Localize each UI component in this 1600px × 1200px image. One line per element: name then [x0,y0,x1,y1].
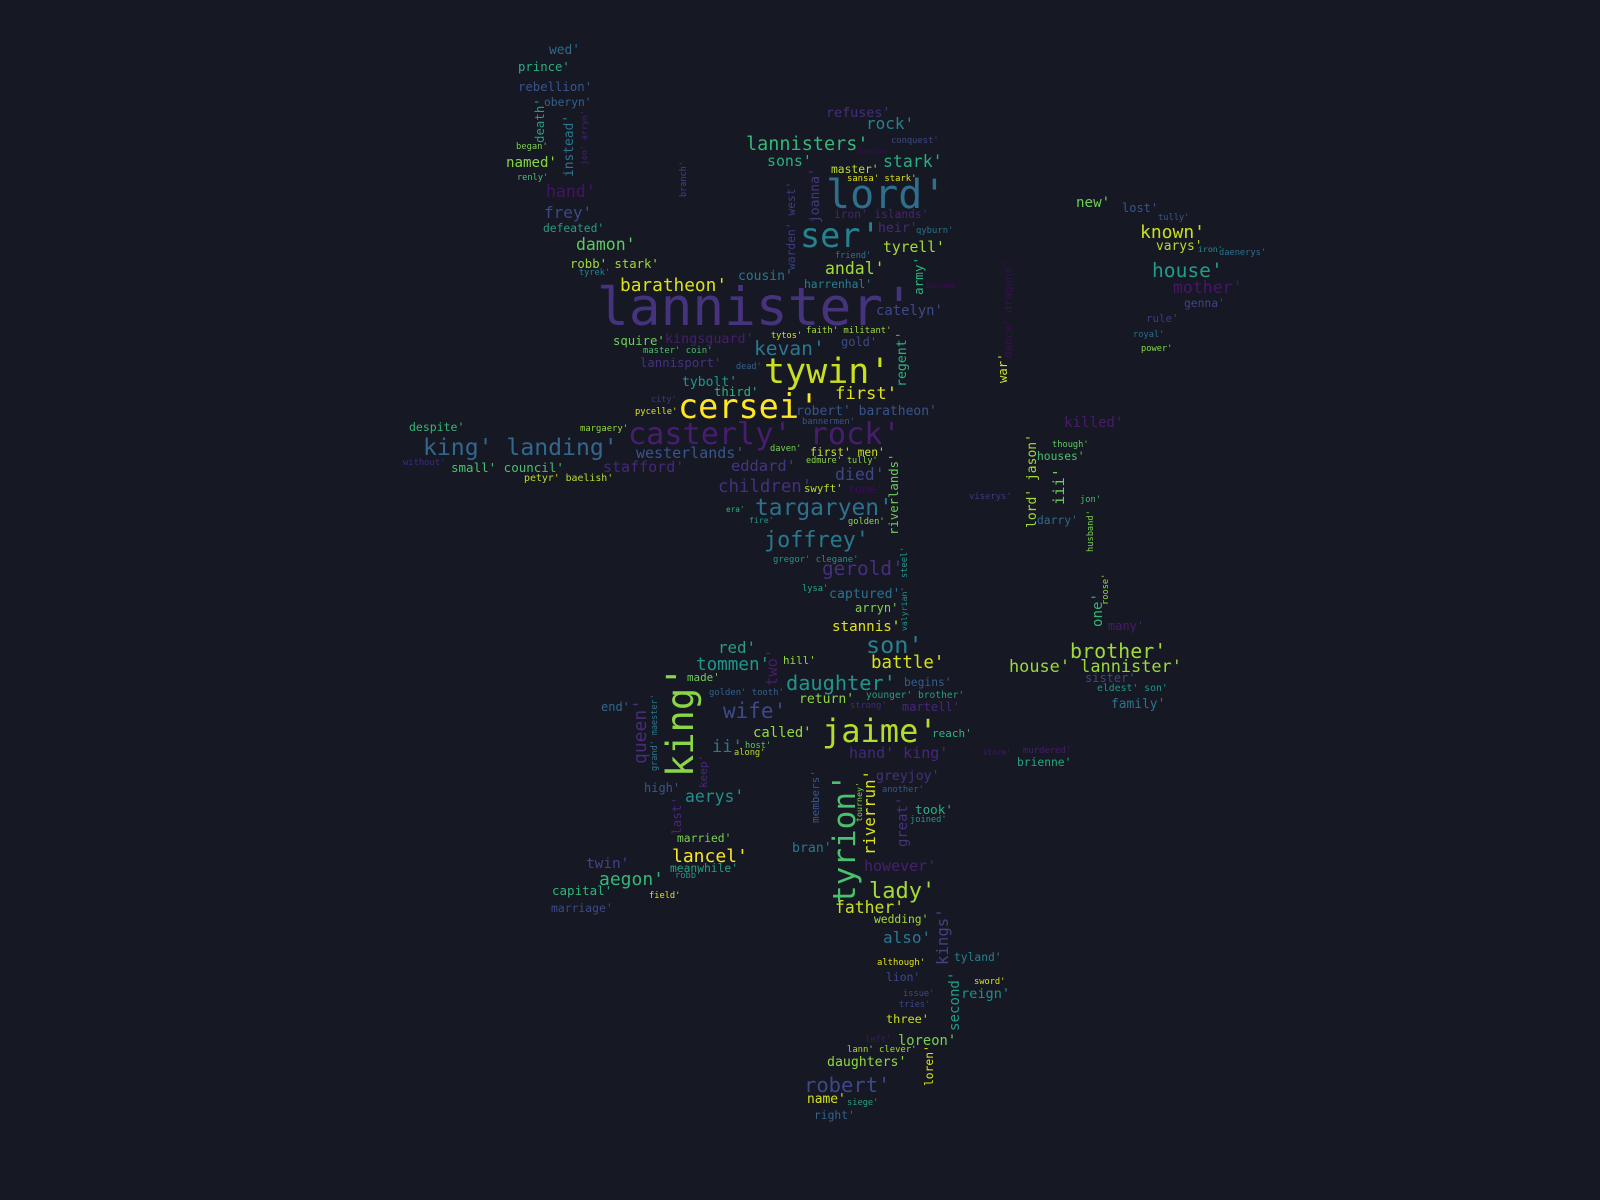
word: younger brother: younger' brother' [866,690,964,701]
word: took: took' [915,802,953,817]
cluster: head [620,106,961,296]
word: heir: heir' [878,221,918,236]
word: become: become' [926,280,961,290]
word: married: married' [677,832,731,845]
word: gold: gold' [841,335,877,349]
word: though: though' [1052,440,1089,450]
word: tourney: tourney' [854,782,864,822]
word: iii: iii' [1050,468,1068,505]
word: reach: reach' [932,727,972,740]
cluster: lower leg [804,898,1010,1122]
word: tries: tries' [899,1000,930,1010]
word: sister: sister' [1085,671,1136,685]
word: tome: tome' [848,482,883,496]
word: name: name' [807,1092,846,1107]
word: end: end' [601,700,630,714]
word: began: began' [516,142,548,152]
word: daughters: daughters' [827,1055,906,1070]
word: edmure tully: edmure' tully' [806,456,878,466]
word: lannisters: lannisters' [746,134,869,155]
word: right: right' [814,1109,855,1122]
word: golden tooth: golden' tooth' [709,688,784,698]
word: wife: wife' [723,699,786,723]
word: tyrek: tyrek' [579,268,610,278]
word: arryn: arryn' [855,601,898,615]
word: gregor clegane: gregor' clegane' [773,555,858,565]
word: daughter: daughter' [786,671,896,695]
word: iron: iron' [1198,244,1223,254]
word: house lannister: house' lannister' [1009,656,1182,676]
word: jon arryn: jon' arryn' [579,110,589,165]
word: lysa: lysa' [802,584,828,594]
word: master: master' [831,163,879,176]
word: tully: tully' [1158,213,1189,223]
word: qyburn: qyburn' [916,226,953,236]
word: dead: dead' [736,362,762,372]
word: three: three' [886,1012,929,1026]
word: loreon: loreon' [898,1033,956,1049]
word: aerys: aerys' [685,787,744,806]
word: murdered: murdered' [1023,746,1071,756]
word: strong: strong' [850,701,887,711]
word: mother: mother' [1173,278,1243,297]
word: swyft: swyft' [804,482,843,495]
word: oberyn: oberyn' [544,96,592,109]
cluster: upper right hand [996,195,1266,383]
word: kings: kings' [933,908,952,965]
word: casterly rock: casterly' rock' [628,417,901,452]
word: tybolt: tybolt' [682,375,737,390]
word: family: family' [1111,697,1165,712]
word: red: red' [718,638,756,657]
word: reign: reign' [961,986,1010,1002]
word: lancel: lancel' [672,846,748,867]
word: grand maester: grand' maester' [650,694,660,771]
word: kevan: kevan' [754,337,825,360]
word: genna: genna' [1184,297,1225,310]
word: damion: damion' [857,146,892,156]
word: capital: capital' [552,883,612,898]
word: issue: issue' [903,989,934,999]
word: aegon: aegon' [599,869,664,890]
word: robb stark: robb' stark' [570,257,659,271]
word: battle: battle' [871,653,944,673]
word: second: second' [947,972,963,1031]
word: cersei: cersei' [678,387,819,426]
word: power: power' [1141,344,1172,354]
word: children: children' [718,477,812,497]
word: fire: fire' [749,515,774,525]
word: wed: wed' [549,43,580,58]
word: golden: golden' [848,517,885,527]
word: new: new' [1076,195,1110,211]
word: bran: bran' [792,841,832,856]
word: along: along' [734,748,765,758]
word: tywin: tywin' [764,352,890,392]
word: joanna: joanna' [808,168,823,223]
word: members: members' [809,770,822,823]
word: era: era' [726,505,745,514]
word: however: however' [864,857,936,875]
word: without: without' [403,458,445,468]
word: lannister: lannister' [597,277,915,338]
word: stark: stark' [883,152,943,171]
word: targaryen: targaryen' [755,495,893,521]
word: war: war' [996,353,1010,383]
word: killed: killed' [1064,415,1123,431]
word: field: field' [649,891,680,901]
word: another: another' [882,785,924,795]
word: frey: frey' [544,203,592,222]
word: tyrion: tyrion' [827,773,863,904]
word: lost: lost' [1122,201,1158,215]
word: stafford: stafford' [603,458,684,476]
word: regent: regent' [895,331,910,387]
word: lord jason: lord' jason' [1025,434,1040,528]
word: siege: siege' [847,1098,878,1108]
word: although: although' [877,958,925,968]
word: last: last' [669,797,684,835]
word: sword: sword' [974,977,1005,987]
word: called: called' [753,725,812,741]
word: known: known' [1140,222,1205,243]
word: also: also' [883,928,931,947]
word: harrenhal: harrenhal' [804,278,872,291]
word: varys: varys' [1156,239,1203,254]
word: eddard: eddard' [731,457,796,475]
word: tytos: tytos' [771,331,802,341]
word: city: city' [651,395,677,405]
word: tyrell: tyrell' [883,239,945,256]
word: rock: rock' [866,114,914,133]
word: meanwhile: meanwhile' [670,862,738,875]
word: lannisport: lannisport' [640,356,721,370]
word: son: son' [866,631,923,659]
word: warden west: warden' west' [785,182,798,270]
word: jon: jon' [1080,495,1101,505]
word: king landing: king' landing' [423,435,618,461]
word: army: army' [911,257,926,295]
word: margaery: margaery' [580,424,628,434]
word: loren: loren' [923,1045,936,1086]
word: king: king' [659,666,702,777]
word: first men: first' men' [810,446,885,459]
word: valyrian: valyrian' [899,587,909,631]
word: sansa stark: sansa' stark' [847,174,916,184]
word: one: one' [1090,593,1106,627]
word: iron islands: iron' islands' [834,208,928,221]
word: keep: keep' [697,755,710,788]
word: robert: robert' [804,1073,890,1097]
word: gerold: gerold' [822,557,904,580]
word: petyr baelish: petyr' baelish' [524,473,613,484]
word: renly: renly' [517,173,548,183]
word: despite: despite' [409,420,464,434]
word: eldest son: eldest' son' [1097,683,1168,694]
word: wedding: wedding' [874,913,928,926]
cluster: right middle [969,415,1182,769]
word: queen: queen' [630,699,651,764]
word: faith militant: faith' militant' [806,326,892,336]
word: lord: lord' [826,172,946,218]
word: named: named' [506,155,557,171]
word: small council: small' council' [451,460,564,475]
word: master coin: master' coin' [643,346,712,356]
word: ii: ii' [712,737,743,757]
word: storm: storm' [983,748,1011,757]
word: lady: lady' [869,879,935,904]
word: father: father' [835,898,904,917]
word: robb: robb' [675,871,701,881]
word: viserys: viserys' [969,492,1012,502]
word: defeated: defeated' [543,222,604,235]
word: daven: daven' [770,444,801,454]
word: andal: andal' [825,259,885,278]
word: damon: damon' [576,235,636,254]
word: baratheon: baratheon' [620,275,727,296]
word: begins: begins' [904,676,952,689]
word: many: many' [1108,619,1144,633]
word: first: first' [835,384,897,404]
word: joffrey: joffrey' [764,528,869,553]
word: cousin: cousin' [738,269,793,284]
word: third: third' [714,385,758,399]
word: darry: darry' [1037,514,1078,527]
word: squire: squire' [613,334,665,348]
word: died: died' [835,465,885,484]
word: jaime: jaime' [822,712,938,750]
word: two: two' [763,649,781,686]
word: instead: instead' [562,115,577,177]
word: greyjoy: greyjoy' [876,769,940,784]
word: refuses: refuses' [826,106,890,121]
word: riverlands: riverlands' [887,454,901,535]
word: westerlands: westerlands' [636,444,744,462]
word: houses: houses' [1037,450,1085,463]
word: joined: joined' [910,815,947,825]
word: death: death' [532,98,547,143]
word: lion: lion' [886,970,920,984]
word: kingsguard: kingsguard' [665,332,754,347]
word: made: made' [687,671,720,684]
word: lann clever: lann' clever' [847,1045,916,1055]
word: steel: steel' [900,547,910,578]
word: hand: hand' [546,182,596,201]
word: catelyn: catelyn' [876,303,943,319]
word: rule: rule' [1146,312,1179,325]
word: captured: captured' [829,587,900,602]
word: left: left' [865,1035,891,1045]
word: ser: ser' [800,216,881,255]
word: pycelle: pycelle' [635,407,677,417]
word: house: house' [1152,259,1223,282]
word: brienne: brienne' [1017,756,1071,769]
word: daenerys: daenerys' [1219,248,1266,258]
word: branch: branch' [679,161,689,197]
word: roose: roose' [1101,574,1111,605]
word: rebellion: rebellion' [518,80,592,94]
word: sons: sons' [767,152,812,170]
word: conquest: conquest' [891,136,939,146]
word: husband: husband' [1086,510,1096,552]
word: return: return' [799,692,854,707]
word: friend: friend' [835,251,871,261]
word: tommen: tommen' [696,655,770,675]
word: riverrun: riverrun' [860,770,879,855]
cluster: upper left arm [506,43,689,278]
word: stannis: stannis' [832,619,900,635]
word: royal: royal' [1133,330,1164,340]
cluster: torso [403,277,943,635]
word: host: host' [745,741,771,751]
word: prince: prince' [518,60,570,74]
word: hill: hill' [783,654,816,667]
word: twin: twin' [586,856,629,872]
word: marriage: marriage' [551,901,613,915]
word: dance dragons: dance' dragons' [1002,260,1015,358]
word: bannermen: bannermen' [802,417,855,427]
word: tyland: tyland' [954,951,1002,964]
word: martell: martell' [902,700,960,714]
word: high: high' [644,781,680,795]
word: hand king: hand' king' [849,744,948,762]
cluster: lower centre [551,631,972,915]
word: robert baratheon: robert' baratheon' [796,404,937,419]
word: great: great' [895,797,911,847]
word: brother: brother' [1070,639,1166,663]
